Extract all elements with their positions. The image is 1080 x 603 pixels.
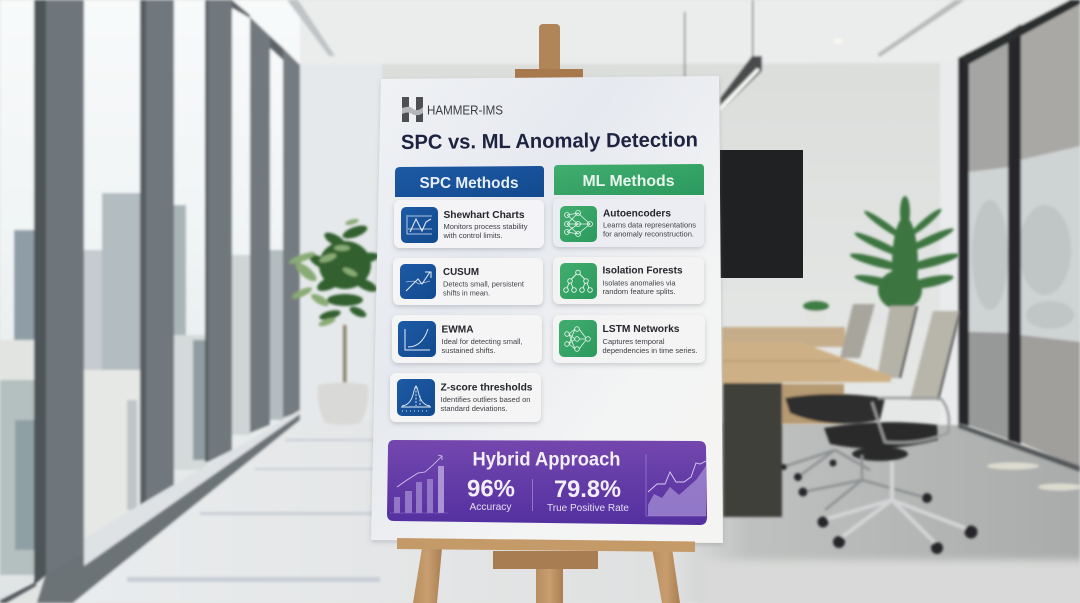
stat: 96% Accuracy: Accuracy [470,502,512,513]
left window columns [34,0,300,585]
back wall [300,64,960,426]
card: Autoencoders: for anomaly reconstruction. [603,230,694,238]
heading: ML Methods: ML Methods [582,173,674,190]
heading: Hybrid Approach [472,450,620,470]
ceiling vents [287,0,335,56]
logo: HAMMER-IMS [402,97,503,122]
wall tv [720,150,803,278]
card: LSTM Networks: Captures temporal [602,337,665,346]
stat: 96% Accuracy: 96% [467,476,515,502]
easel legs [413,548,680,603]
card: LSTM Networks [553,315,705,363]
left windows: sky [0,0,300,600]
floor [70,420,1080,603]
card: EWMA: sustained shifts. [442,346,496,355]
heading: SPC Methods: SPC Methods [420,175,518,192]
card: Z-score thresholds: Identifies outliers based on [440,395,530,404]
card: CUSUM: Detects small, persistent [443,280,525,288]
floor stripes and sun patches [127,439,380,582]
window sill [84,410,300,568]
heading: SPC Methods [395,166,544,197]
card: Shewhart Charts [394,200,544,248]
left windows: city [0,193,283,575]
icon: control chart [401,207,438,243]
stat: 79.8% True Positive Rate: 79.8% [554,477,621,503]
card: LSTM Networks: LSTM Networks [602,324,680,335]
logo: HAMMER-IMS: HAMMER-IMS [427,104,503,118]
table leg [723,383,782,517]
heading: ML Methods [554,164,704,195]
card: Isolation Forests: Isolation Forests [602,266,683,276]
card: EWMA: EWMA [442,324,474,336]
poster board [371,76,723,543]
card: Z-score thresholds: Z-score thresholds [440,382,533,394]
small plant [803,301,829,311]
card: CUSUM [393,258,543,305]
chair seats [785,394,885,424]
card: Z-score thresholds: standard deviations. [440,404,508,413]
easel ledge and block [397,538,695,569]
icon: recurrent network [559,320,597,357]
card: Isolation Forests: random feature splits. [602,287,676,296]
card: Isolation Forests: Isolates anomalies via [602,278,676,288]
chart: area trend [646,454,706,516]
card: EWMA: Ideal for detecting small, [442,337,522,346]
chair bases [783,450,927,510]
chart: bars with trend [390,455,448,513]
card: Isolation Forests [553,257,704,304]
icon: decision tree [560,263,597,299]
easel top peg [515,24,583,79]
icon: neural network [560,206,597,242]
card: Shewhart Charts: with control limits. [443,231,502,240]
ceiling [230,0,1080,66]
card: Shewhart Charts: Shewhart Charts [444,210,525,221]
card: Shewhart Charts: Monitors process stability [444,222,528,231]
card: CUSUM: CUSUM [443,267,479,278]
card: CUSUM: shifts in mean. [443,288,490,298]
title: SPC vs. ML Anomaly Detection [401,128,698,154]
card: Autoencoders: Autoencoders [603,208,671,220]
icon: bell curve [397,379,435,416]
icon: rising trend [400,264,436,299]
card: Autoencoders [553,199,704,247]
right plant [849,196,960,313]
card: EWMA [392,315,542,363]
pendant lamp [684,12,686,78]
right glass wall [968,38,1010,440]
icon: exponential curve [398,321,436,357]
chair backs [840,304,875,358]
panel: Hybrid Approach [387,440,707,525]
card: Z-score thresholds [390,373,541,422]
stat: 79.8% True Positive Rate [547,477,629,514]
cabinet [722,327,845,347]
conference table [722,342,891,383]
left plant [288,218,380,425]
stat: 79.8% True Positive Rate: True Positive Rate [547,503,629,514]
card: Autoencoders: Learns data representations [603,220,696,230]
card: LSTM Networks: dependencies in time series. [602,346,698,355]
under-table wood [782,384,844,424]
